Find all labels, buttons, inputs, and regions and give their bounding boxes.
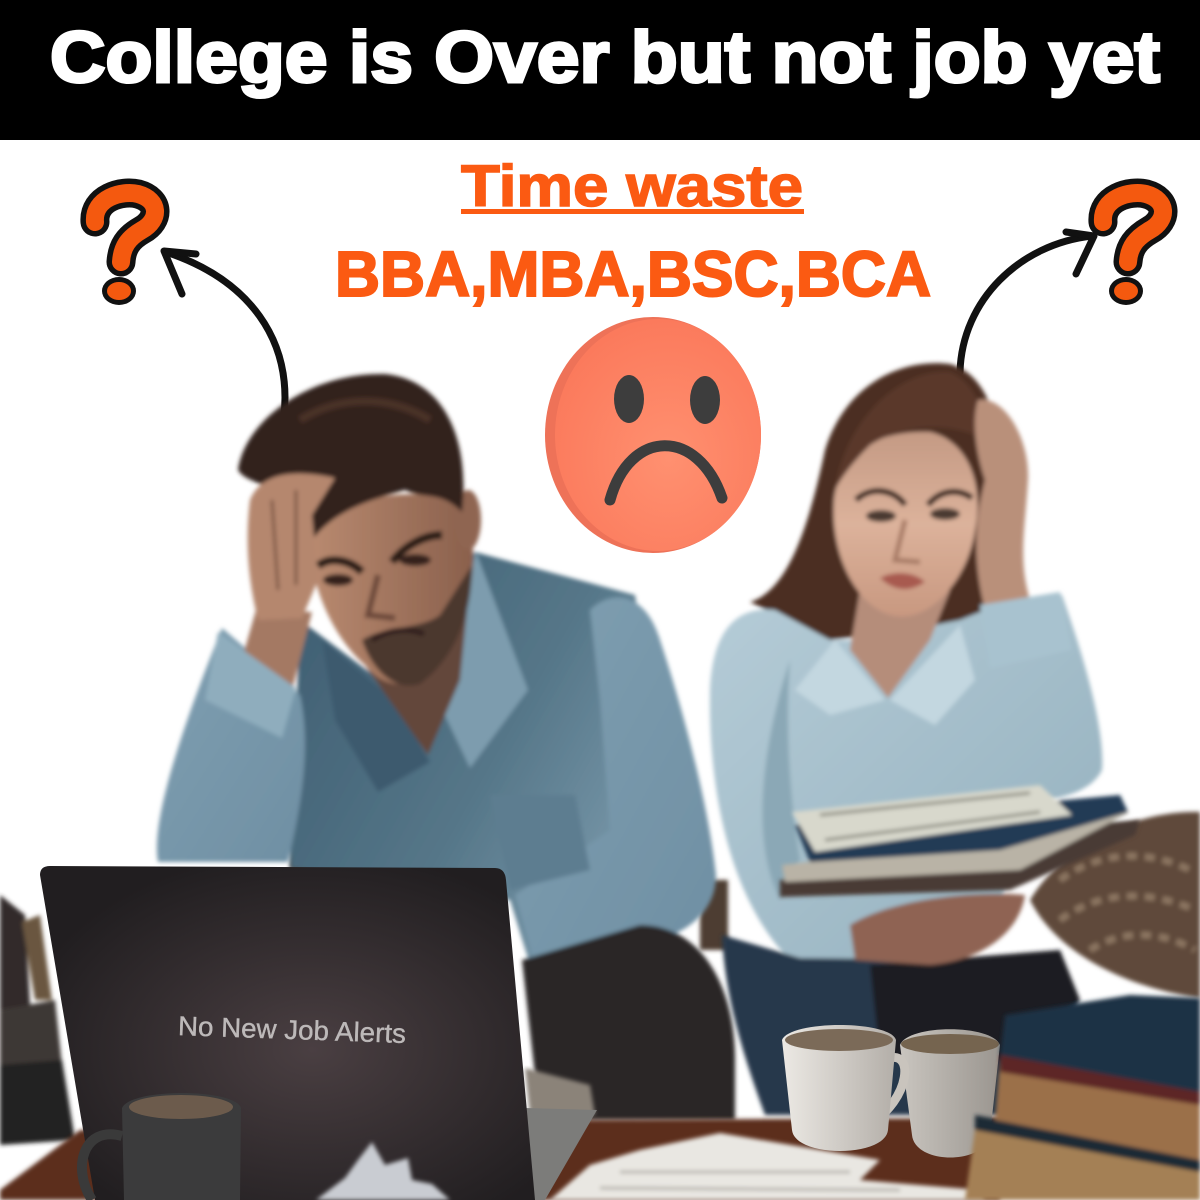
icon: left question mark: [95, 193, 155, 305]
man: neck: [365, 580, 470, 755]
man: trousers: [522, 925, 735, 1120]
woman: dark knee shadow: [870, 950, 1080, 1060]
left sofa: [0, 895, 75, 1145]
dark mug: [82, 1093, 241, 1200]
woman: [710, 363, 1102, 1115]
man: forearm: [236, 610, 312, 690]
white mugs: [782, 1025, 1000, 1158]
man: face: [310, 494, 473, 684]
man: right sleeve: [515, 598, 716, 965]
man: hand: [248, 473, 335, 620]
woman: hand: [975, 400, 1030, 610]
mug: right: [900, 1029, 1000, 1158]
woman: cuff: [980, 592, 1072, 668]
cushion: [1030, 812, 1200, 998]
man: shirt collar right: [440, 552, 528, 768]
title bar: [0, 0, 1200, 140]
woman: brows and eyes: [856, 491, 905, 505]
sofa back between the figures: [290, 790, 728, 950]
man: hair: [238, 374, 463, 540]
man: ear: [455, 490, 481, 550]
man: cuff: [205, 632, 296, 738]
scattered papers: [550, 1133, 985, 1200]
woman: nose and cheek shade: [895, 520, 920, 562]
man: beard: [362, 565, 472, 686]
woman: mouth: [880, 573, 925, 589]
woman: sleeve shadow: [762, 660, 800, 900]
man: shirt collar left: [322, 640, 430, 792]
icon: sad face: [545, 317, 761, 553]
title: College is Over but not job yet: [50, 18, 1160, 98]
icon: right question mark: [1103, 193, 1163, 305]
heading: Time waste: Time waste: [461, 154, 803, 219]
man: left sleeve: [157, 628, 305, 862]
woman: hand under books: [850, 894, 1025, 965]
subheading: degree list: BBA,MBA,BSC,BCA: [335, 238, 931, 310]
man: nose: [368, 575, 395, 618]
laptop: [40, 866, 597, 1200]
man: chest pocket: [490, 795, 590, 890]
woman: neck: [850, 590, 950, 698]
woman: jeans: [722, 935, 1080, 1115]
mug: middle: [782, 1025, 896, 1151]
laptop: screen message: No New Job Alerts: [178, 1011, 406, 1049]
mug: middle handle: [868, 1057, 905, 1125]
stack of folders: [780, 785, 1140, 897]
man: torso shirt: [290, 552, 680, 965]
crumpled paper: [316, 1142, 450, 1200]
woman: hair top: [835, 372, 985, 490]
man: [157, 374, 735, 1120]
arrow: man to question mark: [164, 251, 285, 416]
man: brows and eyes: [318, 535, 442, 572]
woman: face: [834, 432, 978, 617]
laptop: lid: [40, 866, 535, 1200]
arrow: woman to question mark: [960, 232, 1094, 372]
woman: torso shirt: [710, 595, 1102, 970]
woman: hair: [750, 363, 1001, 640]
sofa seat right of laptop: [525, 1068, 595, 1115]
laptop: base: [510, 1108, 597, 1200]
book stack: [965, 995, 1200, 1200]
man: mouth: [372, 630, 424, 640]
table: [0, 1118, 1000, 1200]
woman: collar: [795, 625, 975, 725]
